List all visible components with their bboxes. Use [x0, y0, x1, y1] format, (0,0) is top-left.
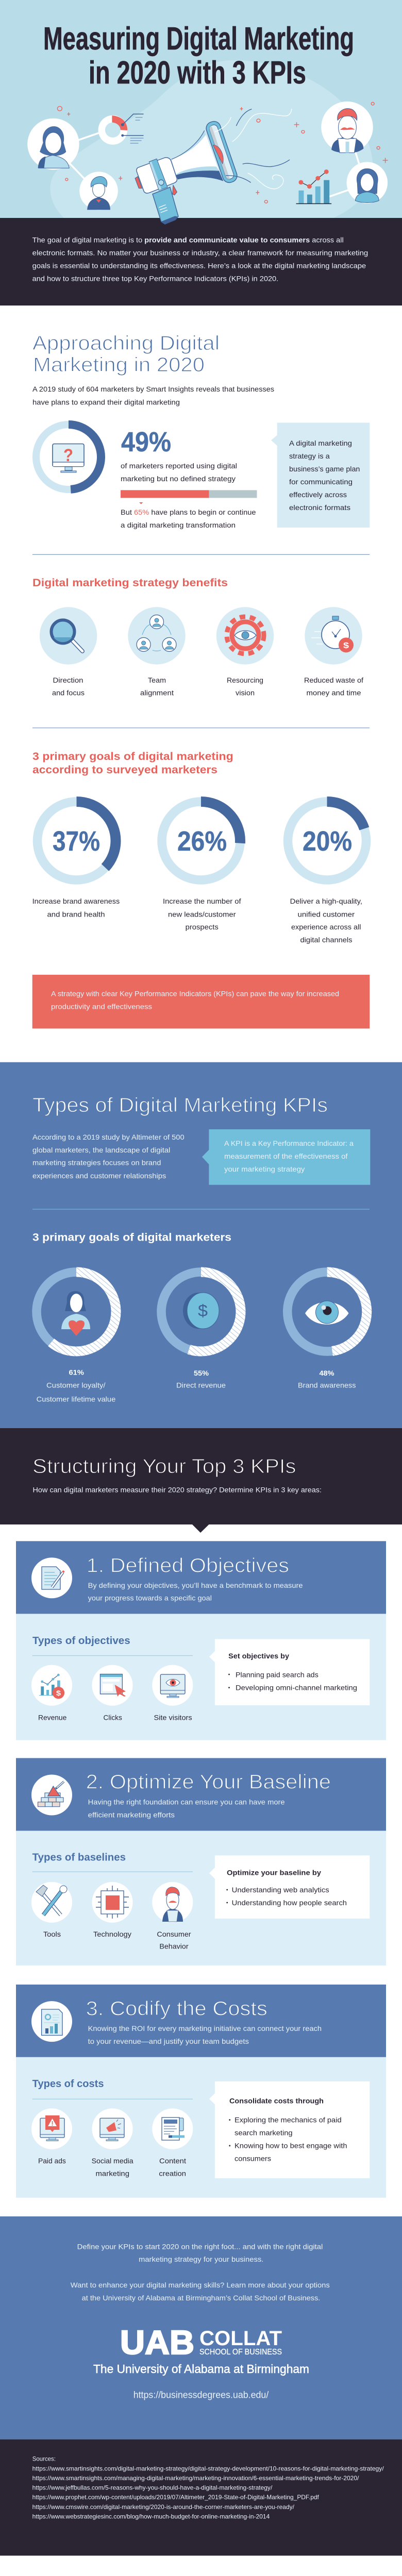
callout: consolidate costs through: consumers: [234, 2155, 271, 2163]
types of costs heading: Types of costs: [32, 2078, 104, 2090]
callout: optimize your baseline by: Understanding how people search: [232, 1899, 347, 1907]
section intro: [32, 385, 274, 406]
ring 61% customer loyalty: [37, 1272, 116, 1403]
intro text: electronic formats. No matter your business or industry, a clear framework for measuring marketing: [32, 248, 368, 257]
section heading: [32, 332, 220, 376]
KPI heading: Types of Digital Marketing KPIs: [32, 1094, 328, 1116]
card 3 text: [88, 2024, 322, 2045]
callout: definition: business’s game plan: [289, 465, 360, 473]
callout: optimize your baseline by: [209, 1855, 370, 1919]
objective: revenue: [31, 1665, 72, 1721]
baseline: technology: Technology: [93, 1930, 131, 1938]
hero illustration: [27, 60, 388, 218]
callout: consolidate costs through: Knowing how to best engage with: [234, 2142, 347, 2150]
callout: definition: effectively across: [289, 490, 347, 499]
intro text: goals is essential to understanding its effectiveness. Here’s a look at the digital marketing landscape: [32, 261, 366, 269]
cost: content creation: Content: [159, 2157, 186, 2165]
benefit: direction and focus: and focus: [52, 688, 85, 697]
callout: definition: [271, 422, 370, 528]
boy avatar: [79, 172, 118, 210]
benefit: reduced waste: $: [343, 641, 349, 650]
ring 61% customer loyalty: Customer loyalty/: [46, 1381, 106, 1389]
baseline: technology: [92, 1882, 133, 1938]
card 1 text: [88, 1581, 303, 1602]
ring 61% customer loyalty: Customer lifetime value: [37, 1395, 116, 1403]
benefit: reduced waste: money and time: [306, 688, 361, 697]
objective: revenue: Revenue: [38, 1713, 67, 1721]
icon: bricks and trowel: [31, 1774, 72, 1816]
sources list: https://www.cmswire.com/digital-marketing/2020-is-around-the-corner-marketers-are-you-ready/: [32, 2504, 295, 2511]
baseline: consumer behavior: [152, 1882, 193, 1951]
KPI intro: experiences and customer relationships: [32, 1172, 166, 1180]
intro text: [32, 236, 368, 283]
benefit: resourcing vision: Resourcing: [227, 676, 263, 684]
card 2 heading: 2. Optimize Your Baseline: [86, 1771, 331, 1793]
benefit: direction and focus: Direction: [53, 676, 83, 684]
university name: The University of Alabama at Birmingham: [93, 2362, 309, 2376]
goals subheading: 3 primary goals of digital marketers: [32, 1231, 231, 1244]
man avatar: [321, 101, 373, 153]
KPI definition callout: your marketing strategy: [224, 1165, 305, 1173]
stat description: [121, 462, 237, 483]
hero panel: [0, 0, 402, 218]
progress bar 65%: [121, 490, 257, 504]
UAB logo: [120, 2324, 282, 2361]
stat description: marketing but no defined strategy: [121, 474, 236, 483]
red sparkles: [57, 102, 388, 203]
donut 37%: 37%: [53, 826, 100, 857]
card 3 heading: 3. Codify the Costs: [86, 1997, 267, 2020]
card 1 text: By defining your objectives, you’ll have a benchmark to measure: [88, 1581, 303, 1589]
benefit: team alignment: [128, 607, 186, 697]
baseline: tools: Tools: [43, 1930, 61, 1938]
65% text: [121, 508, 256, 529]
section intro: A 2019 study of 604 marketers by Smart Insights reveals that businesses: [32, 385, 274, 393]
KPI intro: global marketers, the landscape of digital: [32, 1146, 170, 1154]
card 2: optimize your baseline: [16, 1758, 386, 1965]
donut 20%: digital channels: [300, 936, 353, 944]
objective: clicks: [92, 1665, 133, 1721]
objective: clicks: Clicks: [103, 1713, 122, 1721]
ring 61% customer loyalty: 61%: [69, 1368, 84, 1377]
baseline: tools: [31, 1882, 72, 1938]
section: types of KPIs: [0, 1062, 402, 1428]
icon: eye: [305, 1301, 348, 1325]
callout: definition: strategy is a: [289, 452, 330, 460]
callout: set objectives by: [209, 1639, 370, 1705]
callout: consolidate costs through: search marketing: [234, 2129, 293, 2137]
ring 55% direct revenue: [161, 1272, 241, 1389]
section: three primary goals: [32, 750, 370, 1028]
callout: optimize your baseline by: Understanding web analytics: [232, 1886, 329, 1894]
red callout: productivity and effectiveness: [51, 1003, 152, 1011]
baseline: consumer behavior: Consumer: [157, 1930, 191, 1938]
donut 26%: prospects: [186, 923, 219, 931]
sources list: Sources:: [32, 2455, 56, 2463]
card 2 text: [88, 1798, 285, 1819]
icon: report: [31, 2001, 72, 2042]
closing text: marketing strategy for your business.: [139, 2255, 263, 2263]
card 2 text: Having the right foundation can ensure you can have more: [88, 1798, 285, 1806]
sources list: https://www.jeffbullas.com/5-reasons-why-you-should-have-a-digital-marketing-strategy/: [32, 2485, 273, 2492]
red callout: [32, 975, 370, 1028]
KPI intro: [32, 1133, 185, 1180]
ring 48% brand awareness: [288, 1272, 367, 1389]
KPI definition callout: measurement of the effectiveness of: [224, 1152, 348, 1160]
intro text: and how to structure three top Key Performance Indicators (KPIs) in 2020.: [32, 275, 278, 283]
UAB logo: SCHOOL OF BUSINESS: [199, 2348, 282, 2357]
KPI definition callout: [202, 1129, 370, 1185]
ring 48% brand awareness: 48%: [320, 1369, 334, 1377]
goals heading: [32, 750, 233, 776]
objective: site visitors: [152, 1665, 193, 1721]
section: approaching digital marketing: [32, 332, 370, 529]
analytics donut: [98, 114, 144, 145]
callout: optimize your baseline by: Optimize your baseline by: [227, 1868, 321, 1876]
card 1 heading: 1. Defined Objectives: [87, 1554, 289, 1577]
callout: set objectives by: Planning paid search ads: [236, 1670, 319, 1679]
footer call to action: [0, 2216, 402, 2439]
donut chart 49% with monitor icon: [36, 425, 101, 489]
callout: consolidate costs through: [209, 2081, 370, 2178]
ring 48% brand awareness: Brand awareness: [298, 1381, 356, 1389]
benefit: reduced waste: Reduced waste of: [304, 676, 363, 684]
donut 26%: new leads/customer: [168, 910, 236, 918]
benefit: team alignment: alignment: [140, 688, 174, 697]
ring 55% direct revenue: 55%: [194, 1369, 209, 1377]
sources list: https://www.webstrategiesinc.com/blog/how-much-budget-for-online-marketing-in-2014: [32, 2514, 270, 2520]
cost: paid ads: [31, 2108, 72, 2165]
callout: consolidate costs through: Consolidate costs through: [229, 2097, 324, 2105]
cost: social media marketing: [92, 2108, 133, 2178]
megaphone: [135, 109, 292, 224]
icon: coin: $: [198, 1301, 208, 1320]
sound waves: [215, 109, 292, 189]
cost: social media marketing: Social media: [92, 2157, 133, 2165]
sources list: [32, 2455, 384, 2520]
callout: definition: A digital marketing: [289, 439, 352, 447]
KPI intro: marketing strategies focuses on brand: [32, 1159, 161, 1167]
65% text: But 65% have plans to begin or continue: [121, 508, 256, 516]
closing text: Want to enhance your digital marketing skills? Learn more about your options: [71, 2281, 330, 2289]
intro band: [0, 218, 402, 306]
card 3 text: Knowing the ROI for every marketing initiative can connect your reach: [88, 2024, 322, 2032]
baseline: consumer behavior: Behavior: [159, 1942, 189, 1951]
callout: definition: for communicating: [289, 478, 353, 486]
callout: definition: electronic formats: [289, 503, 350, 512]
objective: site visitors: Site visitors: [154, 1713, 192, 1721]
website URL: https://businessdegrees.uab.edu/: [133, 2389, 269, 2400]
closing text: Define your KPIs to start 2020 on the right foot... and with the right digital: [77, 2242, 323, 2250]
UAB logo: COLLAT: [199, 2327, 282, 2350]
bar and line chart: [296, 170, 331, 204]
woman avatar right: [346, 162, 388, 204]
goals heading: according to surveyed marketers: [32, 764, 217, 776]
section intro: have plans to expand their digital marketing: [32, 398, 180, 406]
donut 37%: Increase brand awareness: [32, 897, 120, 905]
benefit: resourcing vision: vision: [236, 688, 255, 697]
section heading: Marketing in 2020: [33, 354, 205, 376]
benefit: resourcing vision: [216, 607, 274, 697]
stat description: of marketers reported using digital: [121, 462, 237, 470]
section heading: Approaching Digital: [32, 332, 220, 354]
cost: content creation: [152, 2108, 193, 2178]
goals heading: 3 primary goals of digital marketing: [32, 750, 233, 762]
cost: social media marketing: marketing: [96, 2170, 129, 2178]
callout: set objectives by: Set objectives by: [228, 1652, 289, 1660]
intro text: The goal of digital marketing is to provide and communicate value to consumers across all: [32, 236, 344, 244]
card 3: codify the costs: [16, 1985, 386, 2198]
sources list: https://www.smartinsights.com/digital-marketing-strategy/digital-strategy-development/10-reasons-for-digital-marketing-strategy/: [32, 2465, 384, 2472]
donut 20%: Deliver a high-quality,: [290, 897, 362, 905]
cost: content creation: creation: [159, 2170, 186, 2178]
cost: paid ads: Paid ads: [38, 2157, 66, 2165]
main title: in 2020 with 3 KPIs: [89, 55, 306, 91]
benefit: reduced waste: [304, 607, 363, 697]
banner heading: Structuring Your Top 3 KPIs: [32, 1455, 296, 1478]
donut 26%: 26%: [177, 826, 227, 857]
donut 26%: Increase the number of: [163, 897, 241, 905]
callout: consolidate costs through: Exploring the mechanics of paid: [234, 2116, 342, 2124]
donut 20%: [288, 802, 366, 944]
card 2 text: efficient marketing efforts: [88, 1810, 175, 1819]
sources list: https://www.smartinsights.com/managing-digital-marketing/marketing-innovation/6-essential-marketing-trends-for-2020/: [32, 2475, 359, 2482]
closing text: at the University of Alabama at Birmingham’s Collat School of Business.: [82, 2294, 320, 2302]
sources list: https://www.prophet.com/wp-content/uploads/2019/07/Altimeter_2019-State-of-Digital-Marketing_PDF.pdf: [32, 2494, 320, 2501]
benefit: direction and focus: [40, 607, 97, 697]
KPI definition callout: A KPI is a Key Performance Indicator: a: [224, 1139, 354, 1147]
icon: document and pen: [31, 1557, 72, 1598]
donut 20%: unified customer: [298, 910, 355, 918]
card 1 text: your progress towards a specific goal: [88, 1594, 212, 1602]
65% text: a digital marketing transformation: [121, 521, 236, 529]
UAB logo: UAB: [120, 2324, 194, 2361]
stat 49%: 49%: [121, 427, 171, 457]
red callout: A strategy with clear Key Performance Indicators (KPIs) can pave the way for increased: [51, 989, 339, 997]
card 1: defined objectives: [16, 1541, 386, 1740]
banner subtext: How can digital marketers measure their 2020 strategy? Determine KPIs in 3 key areas:: [33, 1486, 322, 1494]
donut 20%: 20%: [303, 826, 352, 857]
icon: coin: [183, 1293, 219, 1329]
callout: set objectives by: Developing omni-channel marketing: [236, 1683, 357, 1691]
donut 26%: [162, 802, 241, 931]
sources panel: [0, 2439, 402, 2555]
objective: revenue: $: [56, 1689, 61, 1697]
woman avatar: [27, 118, 79, 170]
icon: woman with heart: [61, 1291, 90, 1336]
donut 37%: [32, 802, 120, 918]
card 3 text: to your revenue—and justify your team budgets: [88, 2037, 249, 2045]
benefits heading: Digital marketing strategy benefits: [32, 577, 228, 589]
section: structuring KPIs banner: [0, 1428, 402, 1533]
donut 20%: experience across all: [291, 923, 361, 931]
KPI intro: According to a 2019 study by Altimeter of 500: [32, 1133, 185, 1141]
section: benefits: [32, 577, 363, 697]
main title: [43, 21, 354, 91]
donut 37%: and brand health: [47, 910, 105, 918]
benefit: team alignment: Team: [148, 676, 166, 684]
closing text: [71, 2242, 330, 2302]
types of baselines heading: Types of baselines: [32, 1852, 126, 1863]
donut chart 49% with monitor icon: ?: [63, 446, 73, 465]
types of objectives heading: Types of objectives: [32, 1635, 130, 1647]
ring 55% direct revenue: Direct revenue: [176, 1381, 226, 1389]
